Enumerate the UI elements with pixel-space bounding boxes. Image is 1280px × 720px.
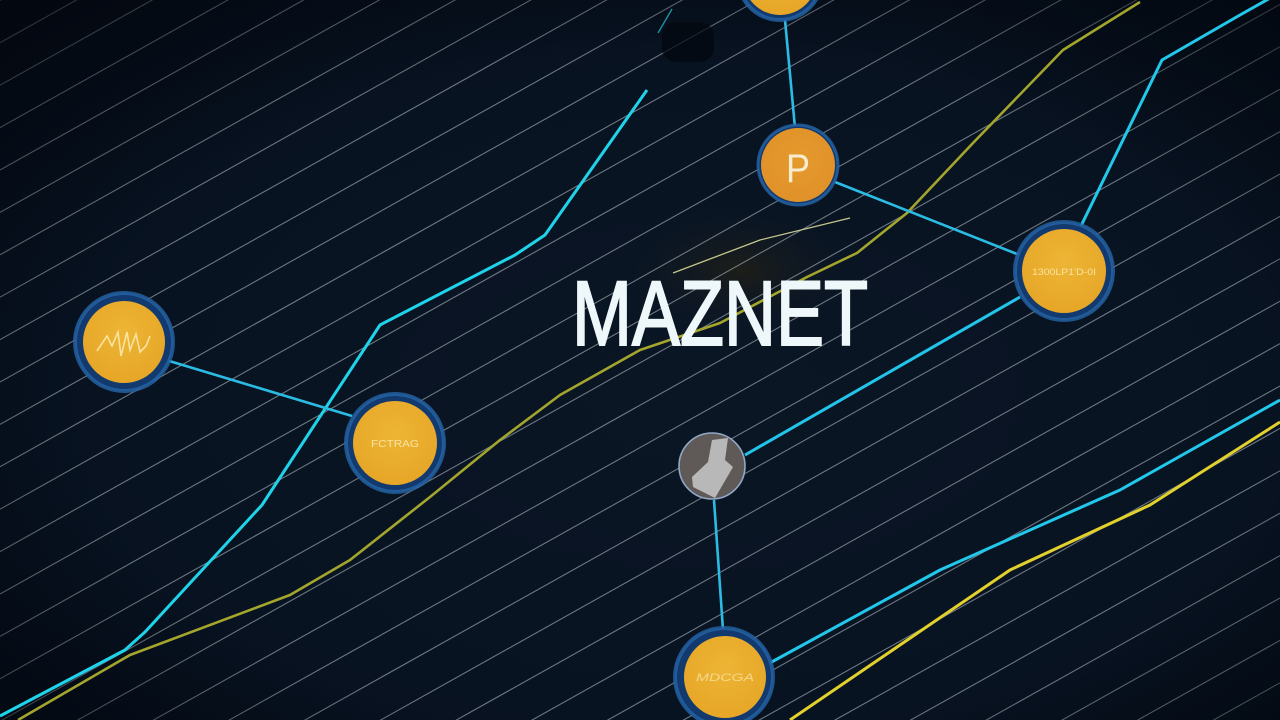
node: right coin [1015, 222, 1113, 320]
node: grey coin with arrow [679, 433, 745, 499]
connector: P node to right node [835, 182, 1022, 256]
node: lower-left coin [346, 394, 444, 492]
small cyan tick [658, 9, 672, 33]
connector: grey node to bottom node [714, 500, 723, 630]
node: bottom coin: MDCGA [696, 672, 754, 684]
connector: left node to lower-left node [166, 360, 352, 416]
icon: arrow [692, 438, 733, 498]
cyan trend line left [0, 90, 647, 716]
node: bottom coin [675, 628, 773, 720]
node: orange P coin: P [786, 147, 810, 191]
dark smudge top centre [662, 22, 714, 62]
title: MAZNET [572, 263, 868, 365]
pale stray stroke [673, 218, 850, 273]
cyan trend line middle [745, 297, 1020, 455]
faint warm glow [610, 200, 870, 340]
cyan trend line upper right [1080, 0, 1272, 228]
icon: squiggle [97, 332, 150, 356]
node: top coin, cropped [738, 0, 822, 20]
cyan trend line lower right [768, 400, 1280, 664]
connector: top node to P node [785, 20, 795, 128]
node: lower-left coin: FCTRAG [371, 439, 419, 450]
node: left coin with squiggle [75, 293, 173, 391]
node: orange P coin [758, 125, 838, 205]
node: right coin: 1300LP1'D-0I [1032, 267, 1096, 277]
yellow trend line lower right [790, 422, 1280, 720]
